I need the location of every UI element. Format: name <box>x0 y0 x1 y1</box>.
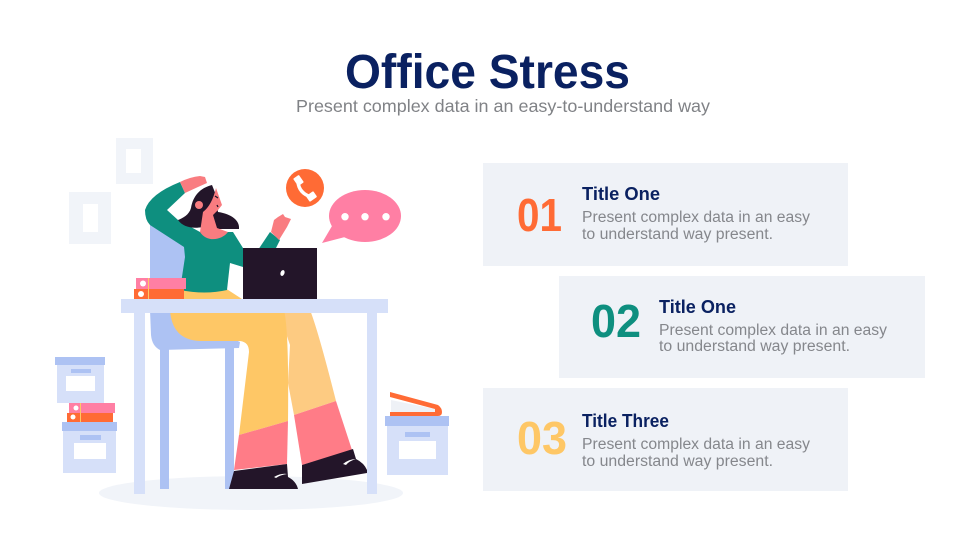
description 03: Present complex data in an easy <box>582 436 810 453</box>
raised hand <box>180 176 207 193</box>
storage box with folder right <box>385 392 449 475</box>
chair <box>150 222 240 489</box>
ear <box>195 201 203 209</box>
waist <box>184 288 242 299</box>
description 01: to understand way present. <box>582 226 773 243</box>
floor shadow <box>99 476 403 510</box>
panel: item 01 <box>483 163 848 266</box>
description 03 <box>582 436 810 470</box>
desk <box>121 299 388 494</box>
heading 03: Title Three <box>582 411 669 431</box>
binders on desk <box>134 278 186 299</box>
hair <box>178 185 239 229</box>
description 02: Present complex data in an easy <box>659 322 887 339</box>
subtitle: Present complex data in an easy-to-understand way <box>296 96 710 116</box>
illustration: woman stressed at desk <box>55 138 449 510</box>
number 02: 02 <box>591 295 641 347</box>
description 02: to understand way present. <box>659 338 850 355</box>
stacked storage boxes left <box>55 357 117 473</box>
neck and face <box>200 188 228 239</box>
eye and mouth <box>215 196 218 207</box>
number 03: 03 <box>517 412 567 464</box>
description 02 <box>659 322 887 355</box>
wall frames <box>69 138 153 244</box>
sweater <box>145 182 243 292</box>
laptop <box>243 248 317 299</box>
woman upper body <box>145 176 291 299</box>
legs and shoes <box>170 310 367 489</box>
heading 01: Title One <box>582 184 660 204</box>
heading 02: Title One <box>659 297 736 317</box>
speech bubble <box>322 190 401 243</box>
icon: phone call <box>286 169 324 207</box>
panel: item 02 <box>559 276 925 378</box>
description 03: to understand way present. <box>582 453 773 470</box>
description 01 <box>582 209 810 243</box>
far arm and hand <box>258 232 280 250</box>
title: Office Stress <box>345 46 630 99</box>
number 01: 01 <box>517 189 562 241</box>
panel: item 03 <box>483 388 848 491</box>
description 01: Present complex data in an easy <box>582 209 810 226</box>
